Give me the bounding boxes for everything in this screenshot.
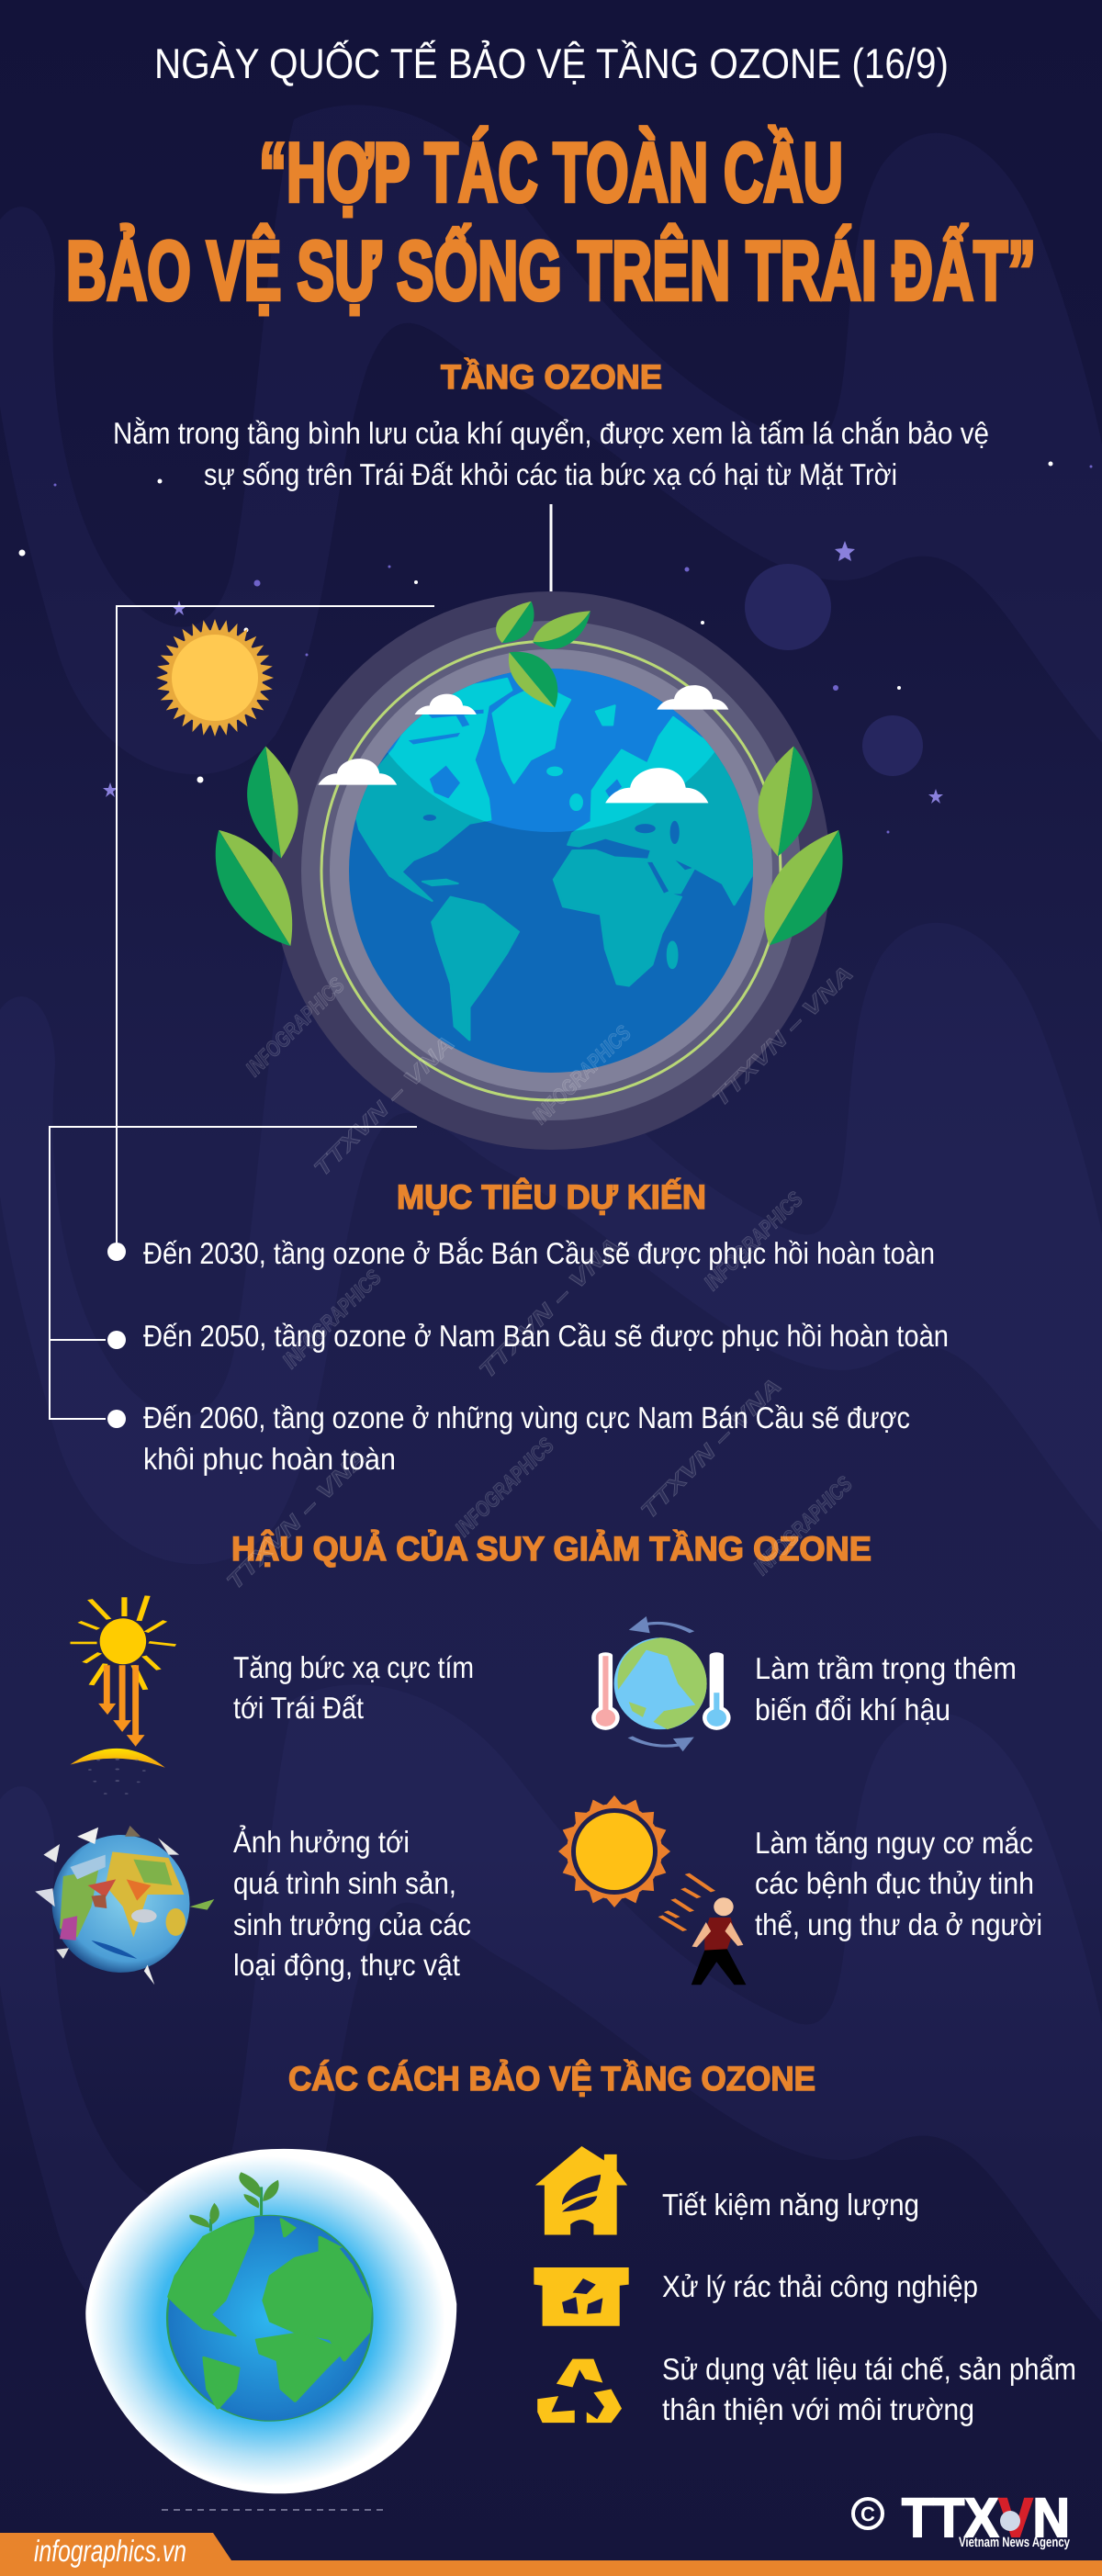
- text: increased UV: [233, 1650, 474, 1725]
- watermarks: TTXVN – VNA: [475, 1233, 625, 1384]
- target 2030: Đến 2030, tầng ozone ở Bắc Bán Cầu sẽ được phục hồi hoàn toàn: [143, 1236, 935, 1270]
- icon: sun and walking person: [553, 1790, 746, 1985]
- icon: ultraviolet sun: [70, 1596, 175, 1794]
- planets: [745, 564, 923, 776]
- item: treat industrial waste: Xử lý rác thải công nghiệp: [662, 2269, 978, 2303]
- section heading: consequences: HẬU QUẢ CỦA SUY GIẢM TẦNG OZONE: [231, 1529, 871, 1568]
- item: recycled materials: thân thiện với môi trường: [662, 2392, 974, 2426]
- text: health risk: [755, 1826, 1042, 1941]
- text: climate change: Làm trầm trọng thêm: [755, 1651, 1017, 1685]
- icon: sun: [147, 610, 283, 746]
- title: [66, 126, 1036, 318]
- watermarks: INFOGRAPHICS: [749, 1472, 858, 1580]
- leaves: [216, 602, 843, 946]
- text block: ozone definition: sự sống trên Trái Đất khỏi các tia bức xạ có hại từ Mặt Trời: [204, 457, 897, 491]
- item: save energy: Tiết kiệm năng lượng: [662, 2188, 919, 2222]
- watermarks: TTXVN – VNA: [636, 1374, 787, 1524]
- text: effect on life: quá trình sinh sản,: [233, 1866, 456, 1900]
- watermarks: [222, 962, 859, 1595]
- item: save energy: [535, 2146, 919, 2235]
- watermarks: INFOGRAPHICS: [528, 1021, 636, 1130]
- text: effect on life: loại động, thực vật: [233, 1948, 460, 1982]
- heading: event name: NGÀY QUỐC TẾ BẢO VỆ TẦNG OZONE (16/9): [154, 39, 949, 87]
- list: target years: [107, 1236, 949, 1476]
- text: effect on life: sinh trưởng của các: [233, 1907, 471, 1941]
- watermarks: INFOGRAPHICS: [278, 1266, 387, 1374]
- logo: TTXVN: Vietnam News Agency: [959, 2535, 1070, 2550]
- watermarks: TTXVN – VNA: [222, 1445, 373, 1595]
- watermarks: INFOGRAPHICS: [700, 1187, 808, 1296]
- item: treat industrial waste: [534, 2267, 978, 2326]
- footer band: infographics.vn: [34, 2534, 186, 2568]
- text: increased UV: Tăng bức xạ cực tím: [233, 1650, 474, 1684]
- text: climate change: biến đổi khí hậu: [755, 1693, 950, 1727]
- globe with ozone layers: [215, 591, 843, 1150]
- watermarks: INFOGRAPHICS: [451, 1434, 559, 1542]
- icon: recycling bin: [534, 2267, 629, 2326]
- text: effect on life: Ảnh hưởng tới: [233, 1825, 410, 1859]
- text: climate change: [755, 1651, 1017, 1727]
- watermarks: TTXVN – VNA: [708, 962, 859, 1112]
- text: effect on life: [233, 1825, 471, 1982]
- text: health risk: các bệnh đục thủy tinh: [755, 1866, 1034, 1900]
- clouds: [318, 685, 728, 803]
- text block: ozone definition: Nằm trong tầng bình lưu của khí quyển, được xem là tấm lá chắn bảo vệ: [113, 416, 989, 450]
- section heading: ozone layer: TẦNG OZONE: [441, 357, 662, 396]
- section heading: targets: MỤC TIÊU DỰ KIẾN: [397, 1177, 706, 1216]
- icon: recycle arrows: [537, 2359, 622, 2423]
- section heading: protection: CÁC CÁCH BẢO VỆ TẦNG OZONE: [288, 2059, 815, 2098]
- logo: TTXVN: TTXVN: [902, 2487, 1070, 2548]
- target 2060: khôi phục hoàn toàn: [143, 1442, 396, 1476]
- text: health risk: thể, ung thư da ở người: [755, 1907, 1042, 1941]
- text: increased UV: tới Trái Đất: [233, 1691, 364, 1725]
- target 2060: Đến 2060, tầng ozone ở những vùng cực Nam Bán Cầu sẽ được: [143, 1400, 910, 1434]
- footer band: [0, 2533, 1102, 2576]
- watermarks: TTXVN – VNA: [309, 1031, 460, 1182]
- watermarks: INFOGRAPHICS: [242, 973, 350, 1082]
- icon: climate globe with thermometers: [591, 1616, 731, 1751]
- item: recycled materials: [537, 2352, 1076, 2426]
- logo: TTXVN: C: [860, 2503, 875, 2525]
- icon: house with leaf: [535, 2146, 627, 2235]
- target 2060: [107, 1400, 910, 1476]
- text: health risk: Làm tăng nguy cơ mắc: [755, 1826, 1033, 1860]
- connector lines: [50, 504, 551, 1419]
- icon: globe with animals: [35, 1826, 214, 1985]
- target 2050: Đến 2050, tầng ozone ở Nam Bán Cầu sẽ được phục hồi hoàn toàn: [143, 1319, 949, 1353]
- faint caption fragment: [162, 2509, 388, 2511]
- illustration: protected earth: [85, 2149, 456, 2493]
- text block: ozone definition: [113, 416, 989, 491]
- starfield: [18, 461, 1093, 834]
